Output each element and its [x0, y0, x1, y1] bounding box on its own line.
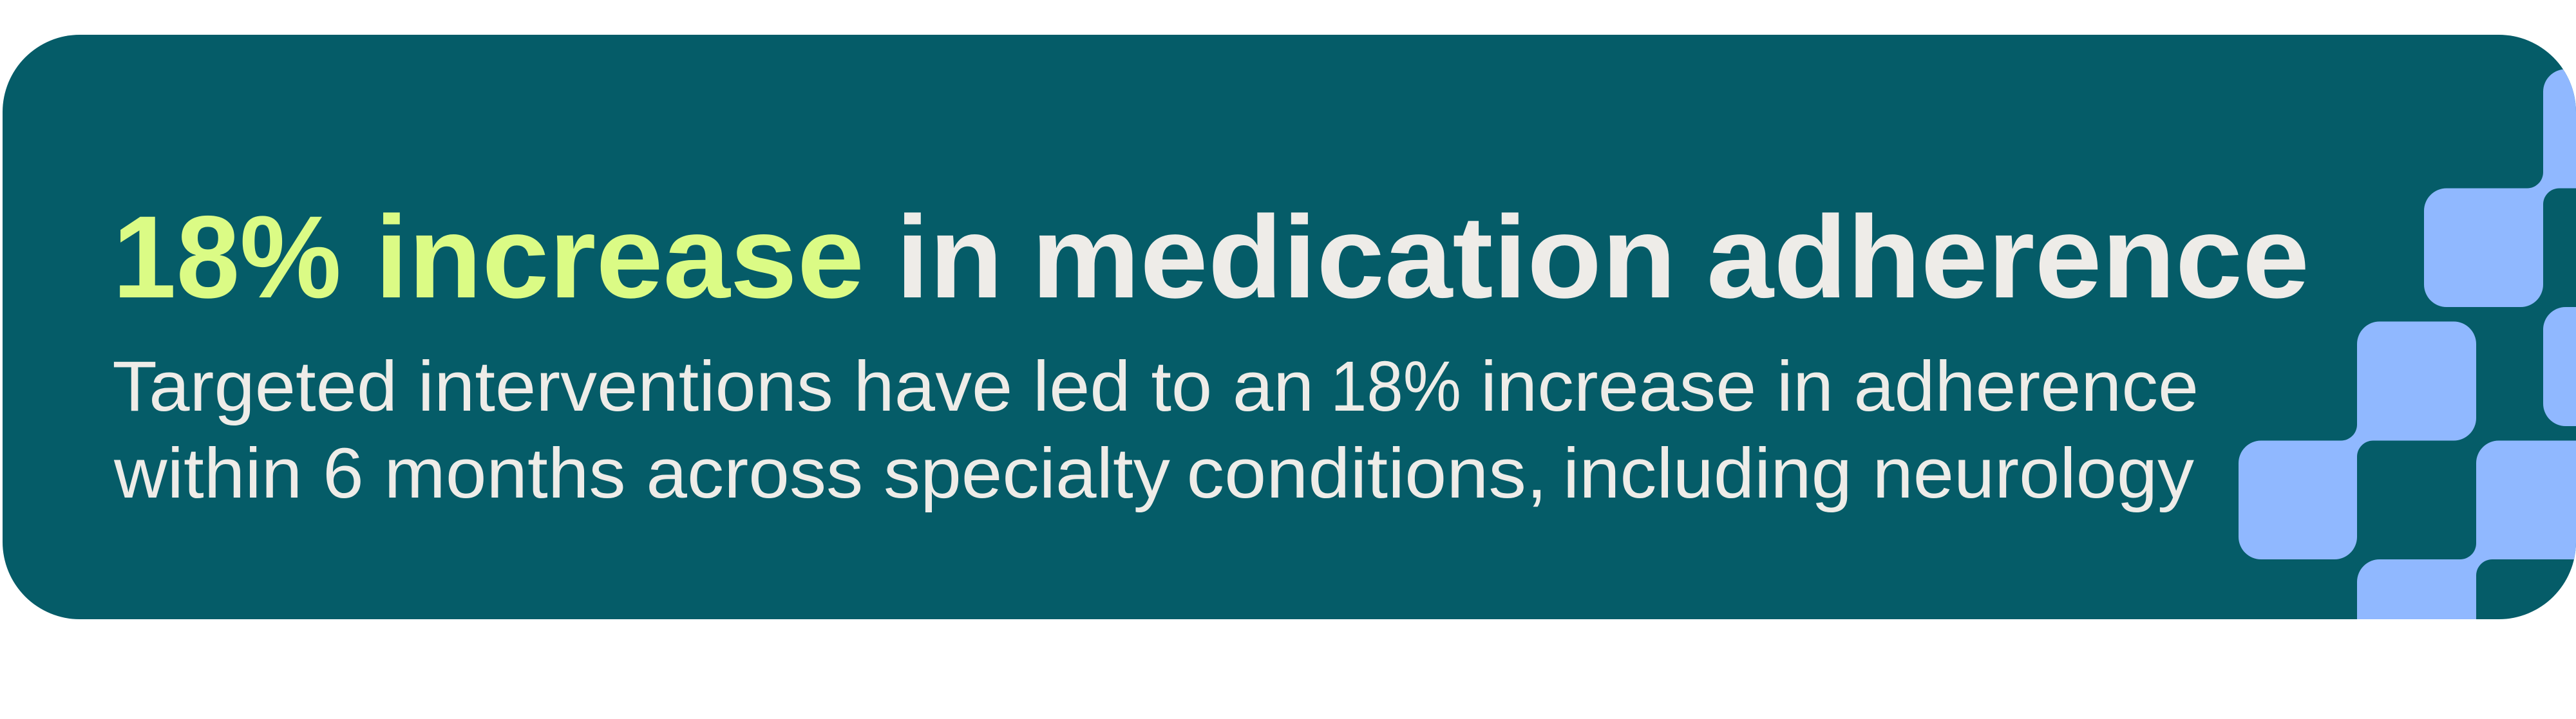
heading	[113, 191, 2309, 322]
body line 2: start: within 6 months across specialty	[113, 434, 1170, 513]
heading highlight: increase: increase	[375, 191, 864, 322]
decorative blue stepped blocks	[2239, 70, 2576, 619]
block: right edge	[2543, 307, 2576, 426]
body line 2: conditions: conditions,	[1186, 434, 1547, 513]
heading word: medication: medication	[1032, 191, 1676, 322]
body line 1: end: increase in adherence	[1481, 347, 2199, 426]
heading word: adherence: adherence	[1707, 191, 2309, 322]
block: top right step	[2424, 70, 2576, 307]
body line 1: 18%: 18%	[1331, 347, 1461, 426]
heading highlight: 18%: 18%	[113, 191, 341, 322]
body text	[112, 347, 2199, 513]
body line 1: start: Targeted interventions have led to an	[112, 347, 1314, 426]
body line 2: end: including neurology	[1563, 434, 2194, 513]
block: bottom step	[2357, 440, 2576, 619]
heading word: in: in	[896, 191, 1003, 322]
block: middle step	[2239, 322, 2476, 559]
